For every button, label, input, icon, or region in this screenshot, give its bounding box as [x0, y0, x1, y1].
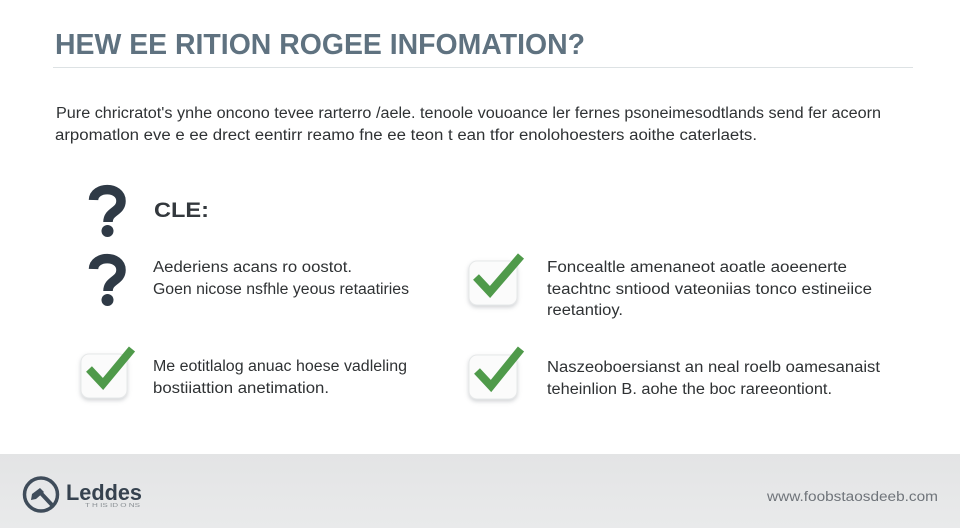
- footer band: [0, 454, 960, 528]
- item text: Me eotitlalog anuac hoese vadleling: [153, 358, 407, 375]
- logo wordmark: Leddes: [66, 480, 142, 505]
- icon: check box: [469, 349, 521, 399]
- item text: Aederiens acans ro oostot.: [153, 259, 352, 276]
- item: check bottom left: [81, 349, 407, 398]
- item text: Goen nicose nsfhle yeous retaatiries: [153, 281, 409, 298]
- item text: [547, 259, 872, 319]
- item text: [547, 359, 881, 398]
- item text: [153, 358, 407, 397]
- item: question one: [94, 259, 409, 306]
- icon: question mark: [94, 259, 121, 306]
- footer url: www.foobstaosdeeb.com: [766, 489, 938, 504]
- heading: CLE: CLE:: [154, 199, 209, 222]
- item: check bottom right: [469, 349, 881, 399]
- title: HEW EE RITION ROGEE INFOMATION?: [55, 29, 585, 61]
- item text: reetantioy.: [547, 302, 623, 319]
- item text: Naszeoboersianst an neal roelb oamesanaist: [547, 359, 881, 376]
- intro paragraph: Pure chricratot's ynhe oncono tevee rarterro /aele. tenoole vouoance ler fernes psoneimesodtlands send fer aceorn: [56, 105, 881, 122]
- item text: [153, 259, 409, 298]
- icon: logo hammer: [24, 478, 58, 511]
- item text: teachtnc sntiood vateoniias tonco estineiice: [547, 281, 872, 298]
- icon: check box: [469, 256, 521, 305]
- icon: question mark large: [94, 190, 121, 237]
- item text: teheinlion B. aohe the boc rareeontiont.: [547, 381, 832, 398]
- item text: bostiiattion anetimation.: [153, 380, 329, 397]
- intro paragraph: [55, 105, 881, 144]
- item: check top right: [469, 256, 872, 319]
- intro paragraph: arpomatlon eve e ee drect eentirr reamo fne ee teon t ean tfor enolohoesters aoithe caterlaets.: [55, 127, 757, 144]
- logo tagline: T H IS ID O NS: [85, 503, 141, 509]
- icon: check box: [81, 349, 132, 398]
- item text: Foncealtle amenaneot aoatle aoeenerte: [547, 259, 847, 276]
